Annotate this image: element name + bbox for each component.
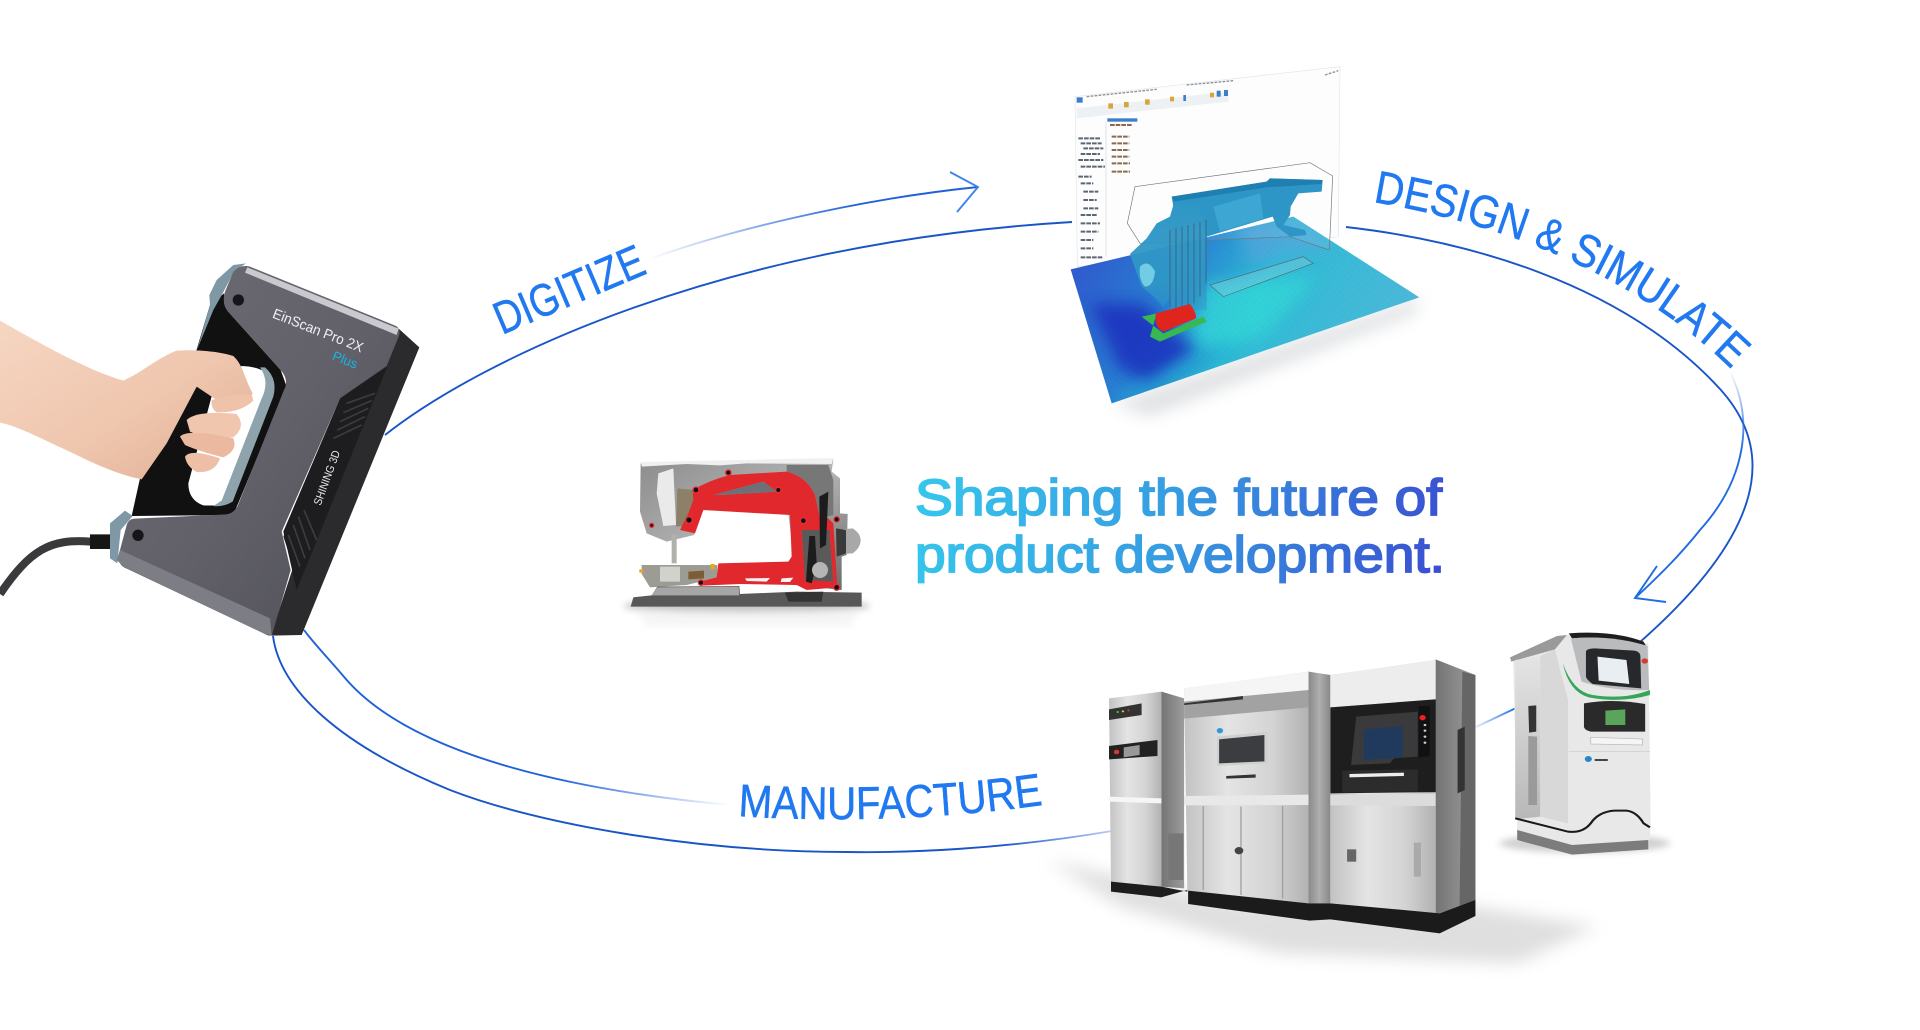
scanner variant: Plus	[330, 348, 360, 372]
handwheel	[836, 528, 861, 557]
path for manufacture label	[738, 800, 1070, 819]
outline of machine	[1127, 163, 1333, 250]
small printer door	[1584, 701, 1645, 732]
motor compartment	[802, 530, 833, 583]
toolbar icons	[1077, 71, 1338, 122]
handle opening	[188, 366, 273, 506]
inner dark cavity	[787, 465, 833, 518]
printer shadow	[1499, 834, 1670, 853]
small printer emergency button	[1642, 658, 1648, 664]
software window	[1075, 67, 1340, 267]
beam dark edge	[1172, 178, 1323, 202]
large printer left cabinet	[1109, 692, 1187, 897]
small printer screen	[1586, 648, 1641, 688]
small printer	[1510, 633, 1651, 855]
headline line one: Shaping the future of	[915, 469, 1443, 526]
large printer centre module	[1184, 672, 1309, 903]
hand and arm	[0, 321, 253, 479]
cycle arrows and connecting curves	[273, 172, 1753, 852]
beam shading	[1213, 193, 1263, 232]
icon: handheld 3D scanner in hand	[0, 263, 419, 636]
motor boss	[1140, 263, 1155, 287]
scanner name: EinScan Pro 2X	[270, 306, 366, 356]
green trim	[1563, 663, 1650, 700]
curve: design software to metal printer	[1346, 227, 1753, 642]
infographic canvas	[0, 66, 1754, 968]
large printer column	[1309, 672, 1330, 903]
model label	[1528, 736, 1537, 805]
casing	[640, 459, 848, 590]
flow field patches	[1090, 217, 1337, 403]
top edge highlight	[245, 267, 399, 335]
base reflection	[633, 608, 862, 627]
presser foot and needle	[672, 535, 677, 563]
scanner rear housing	[132, 293, 287, 516]
vertical column	[1130, 205, 1207, 310]
panel: design and simulation software	[1071, 67, 1419, 417]
icon: sewing machine cutaway	[623, 458, 870, 627]
label: DIGITIZE: DIGITIZE	[486, 234, 652, 344]
model tree	[1078, 125, 1132, 257]
hot spot	[1142, 304, 1207, 342]
headline	[915, 469, 1445, 583]
large printer base	[1188, 891, 1475, 933]
simulation plane	[1071, 217, 1419, 403]
red frame	[680, 472, 837, 590]
label: MANUFACTURE: MANUFACTURE	[741, 774, 1042, 820]
arrow: manufacture	[304, 630, 730, 805]
vent panel	[283, 367, 387, 590]
label: DESIGN & SIMULATE: DESIGN & SIMULATE	[1376, 171, 1752, 368]
translucent edge strips	[110, 263, 246, 563]
vent slats	[288, 393, 375, 567]
scanner front face	[118, 266, 400, 636]
panel: metal 3D printers	[1048, 633, 1670, 963]
connector between printers	[1476, 708, 1516, 727]
arrow: digitize	[647, 172, 978, 260]
curve: scanner to design software	[385, 222, 1072, 435]
headline line two: product development.	[915, 526, 1445, 583]
large printer side	[1436, 659, 1475, 913]
lower mechanism	[639, 564, 717, 587]
needle head	[657, 468, 676, 526]
bottom edge highlight	[117, 550, 272, 635]
sidebar divider	[1104, 122, 1107, 257]
frame bolts	[650, 470, 840, 590]
scanner side panel	[271, 329, 419, 636]
flow mesh	[1071, 217, 1419, 403]
curve: printers to scanner outer	[273, 636, 1112, 852]
horizontal beam	[1172, 178, 1323, 237]
cut-away mechanism	[1130, 178, 1323, 310]
base shadow	[623, 599, 870, 613]
base plate	[631, 586, 862, 607]
rods	[1170, 220, 1206, 310]
black trim	[1515, 811, 1650, 832]
scanner cable	[0, 541, 117, 594]
large printer right module	[1330, 660, 1445, 913]
head gears	[676, 488, 694, 527]
path for design label	[1373, 202, 1760, 398]
arrow: design and simulate	[1635, 368, 1743, 602]
lower arm wireframe	[1210, 257, 1313, 297]
floor shadow	[1048, 860, 1597, 963]
plane shadow	[1112, 297, 1419, 417]
handle bevel	[213, 367, 275, 506]
casing top edge	[641, 458, 833, 467]
brand on side: SHINING 3D	[312, 449, 343, 507]
pulley	[812, 562, 828, 578]
mounting holes	[132, 294, 244, 541]
belts	[806, 492, 828, 583]
small printer base	[1517, 830, 1648, 855]
